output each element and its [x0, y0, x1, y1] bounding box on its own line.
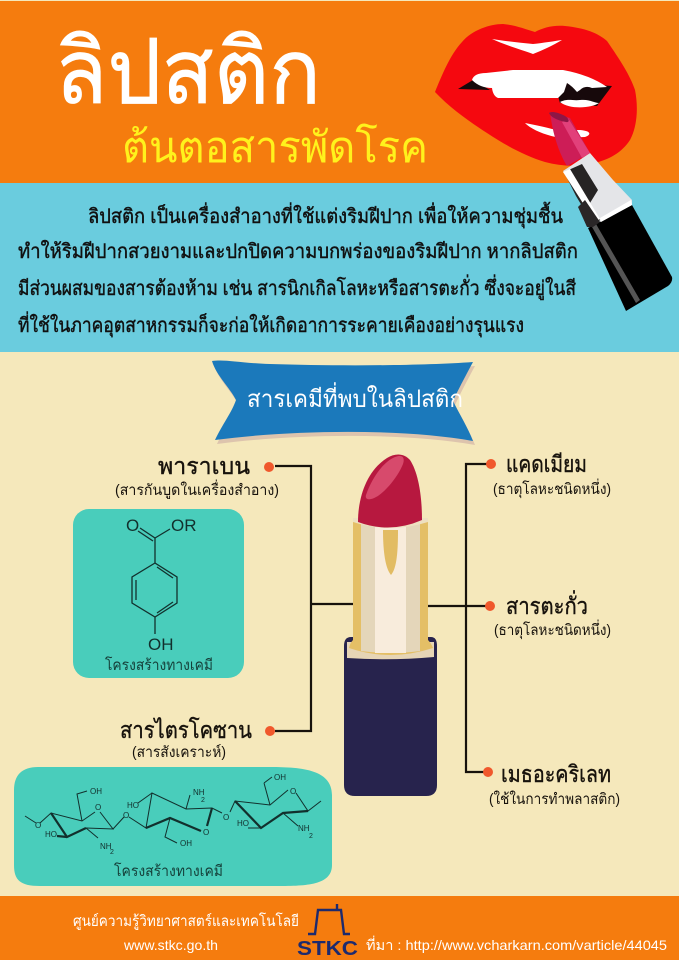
chemical structure: chitosan: NH [298, 824, 310, 833]
label: lead: สารตะกั่ว [506, 590, 588, 619]
label: chitosan: สารไตรโคซาน [120, 717, 252, 743]
chemical structure: chitosan: OH [274, 773, 286, 782]
chemical structure: chitosan: O [35, 821, 41, 830]
chemical structure: chitosan: NH [193, 788, 205, 797]
label: cadmium [493, 451, 611, 499]
chemical structure: paraben: OR [171, 516, 196, 535]
footer: organisation: www.stkc.go.th [123, 937, 218, 953]
text block: introduction: ที่ใช้ในภาคอุตสาหกรรมก็จะก่อให้เกิดอาการระคายเคืองอย่างรุนแรง [18, 311, 524, 338]
chemical structure: chitosan: O [123, 811, 129, 820]
chemical structure: chitosan: O [223, 813, 229, 822]
subtitle: ต้นตอสารพัดโรค [122, 123, 428, 172]
chemical structure: paraben: O [126, 516, 139, 535]
icon: red lips [435, 24, 637, 166]
label: methacrylate: เมธอะคริเลท [501, 761, 611, 787]
label: chitosan: (สารสังเคราะห์) [132, 744, 226, 761]
chemical structure: chitosan: HO [45, 830, 57, 839]
chemical structure: chitosan: NH [100, 842, 112, 851]
label: paraben [115, 453, 279, 499]
label: paraben: (สารกันบูดในเครื่องสำอาง) [115, 479, 279, 499]
chemical structure: chitosan: O [290, 787, 296, 796]
chemical structure: paraben: OH [148, 635, 174, 654]
label: paraben: พาราเบน [158, 453, 250, 479]
panel: paraben structure [73, 509, 244, 678]
text block: introduction: ทำให้ริมฝีปากสวยงามและปกปิดความบกพร่องของริมฝีปาก หากลิปสติก [18, 240, 578, 263]
chemical structure: chitosan: HO [237, 819, 249, 828]
panel: cyan introduction [0, 183, 679, 352]
panel: orange footer [0, 896, 679, 960]
label: cadmium: แคดเมียม [506, 451, 587, 477]
icon: STKC logo [297, 904, 358, 960]
chemical structure: chitosan: O [95, 803, 101, 812]
panel: orange header [0, 1, 679, 183]
chemical structure: chitosan: 2 [309, 833, 313, 840]
icon: black lipstick [549, 112, 672, 311]
chemical structure: chitosan [25, 773, 321, 856]
banner: heading ribbon [212, 360, 475, 445]
label: methacrylate [489, 761, 620, 808]
label: methacrylate: (ใช้ในการทำพลาสติก) [489, 790, 620, 808]
footer: organisation [73, 912, 299, 953]
title: ลิปสติก [55, 23, 321, 123]
chemical structure: paraben [126, 516, 196, 654]
icon: central lipstick [344, 454, 437, 796]
chemical structure: chitosan: O [203, 828, 209, 837]
text block: introduction: มีส่วนผสมของสารต้องห้าม เช่น สารนิกเกิลโลหะหรือสารตะกั่ว ซึ่งจะอยู่ในสี [18, 274, 576, 301]
caption: โครงสร้างทางเคมี [114, 862, 223, 880]
connector lines [275, 464, 490, 772]
label: lead [494, 590, 611, 640]
label: cadmium: (ธาตุโลหะชนิดหนึ่ง) [493, 478, 611, 499]
footer: source: ที่มา : http://www.vcharkarn.com/varticle/44045 [366, 936, 667, 953]
text block: introduction: ลิปสติก เป็นเครื่องสำอางที่ใช้แต่งริมฝีปาก เพื่อให้ความชุ่มชื้น [88, 202, 563, 229]
heading text: สารเคมีที่พบในลิปสติก [247, 382, 463, 413]
caption: โครงสร้างทางเคมี [105, 656, 213, 674]
chemical structure: chitosan: OH [180, 839, 192, 848]
label: chitosan [120, 717, 252, 761]
footer: organisation: ศูนย์ความรู้วิทยาศาสตร์และเทคโนโลยี [73, 912, 299, 930]
icon: STKC logo: STKC [297, 938, 358, 960]
icon: connector dots [264, 459, 496, 777]
chemical structure: chitosan: 2 [110, 849, 114, 856]
chemical structure: chitosan: 2 [201, 797, 205, 804]
panel: chitosan structure [14, 767, 332, 886]
label: lead: (ธาตุโลหะชนิดหนึ่ง) [494, 619, 611, 640]
chemical structure: chitosan: HO [127, 801, 139, 810]
text block: introduction [18, 202, 578, 338]
chemical structure: chitosan: OH [90, 787, 102, 796]
